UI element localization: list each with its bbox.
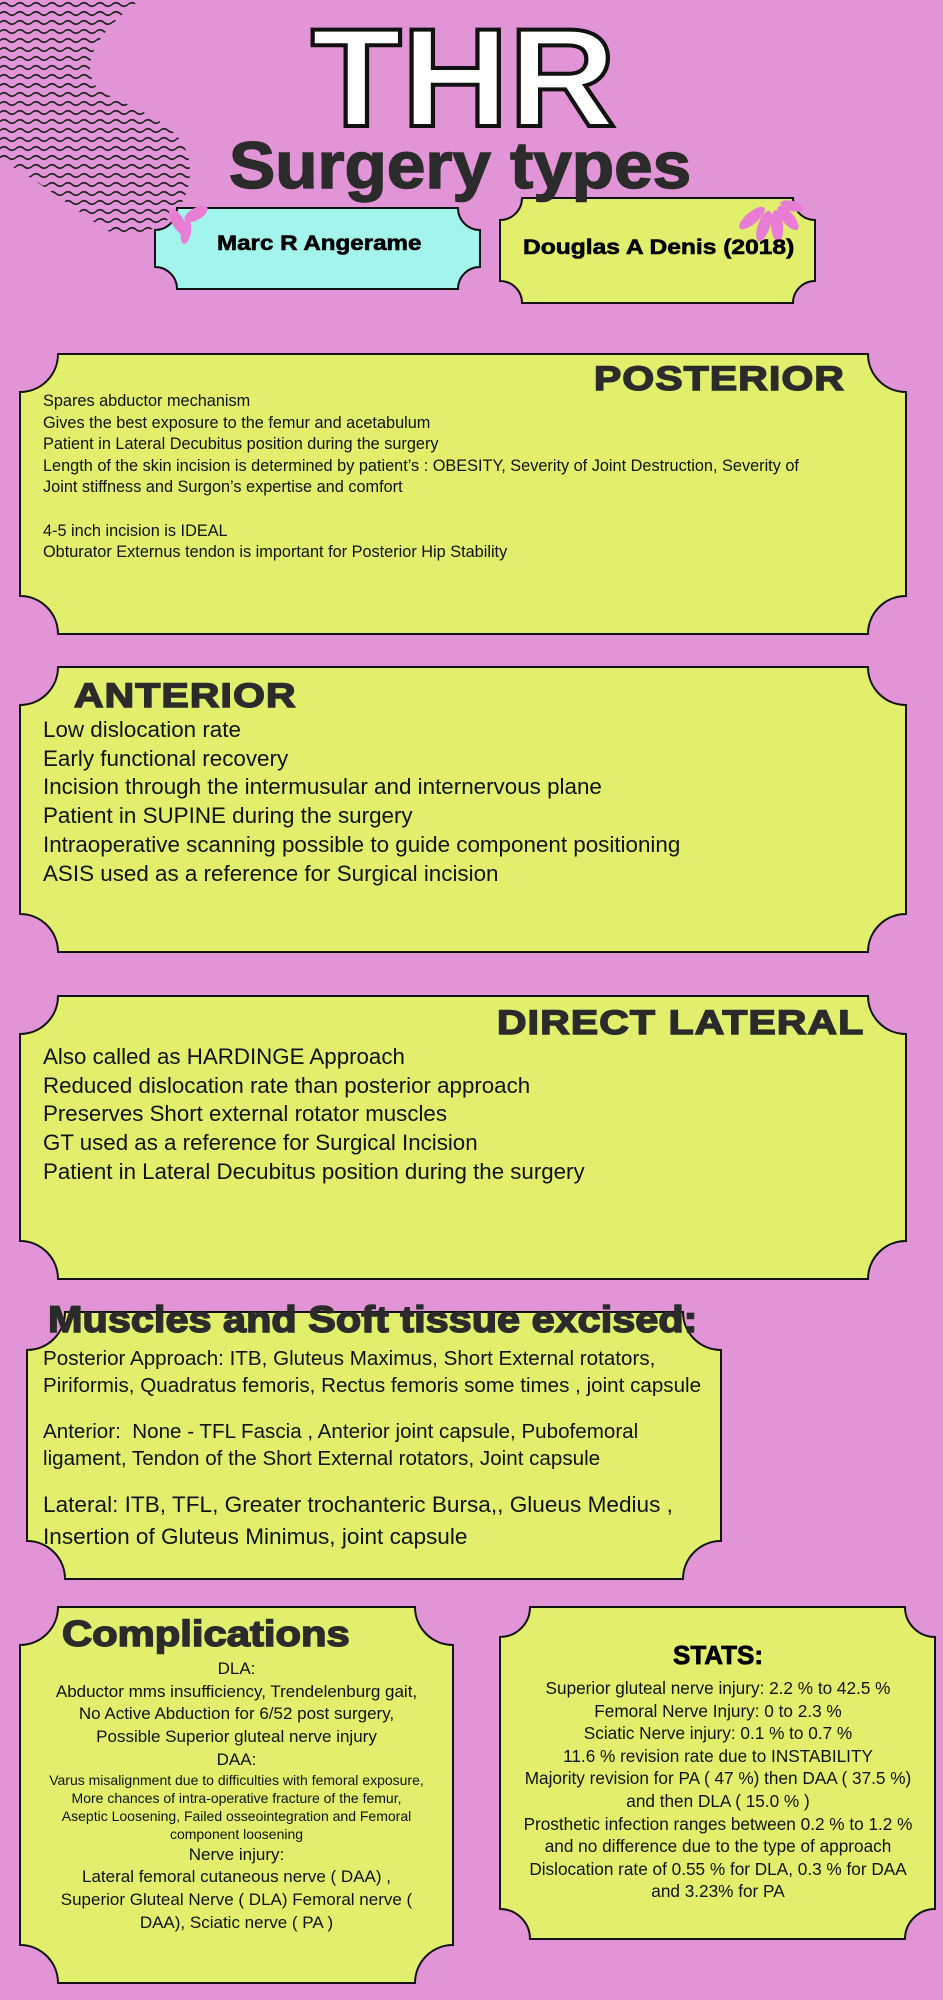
text: complications list: Superior Gluteal Nerve ( DLA) Femoral nerve ( [61, 1890, 412, 1909]
panel: direct lateral [43, 1004, 864, 1184]
heading: ANTERIOR: ANTERIOR [74, 677, 297, 715]
panel: anterior [43, 677, 680, 886]
text: stats list: 11.6 % revision rate due to INSTABILITY [563, 1746, 873, 1766]
author: Douglas A Denis: Douglas A Denis (2018) [523, 236, 794, 259]
text: stats list [524, 1678, 912, 1901]
decoration: wavy lines [0, 0, 190, 232]
author: Marc R Angerame: Marc R Angerame [217, 232, 421, 255]
text: lateral points: Preserves Short external rotator muscles [43, 1101, 447, 1126]
text: posterior points: Spares abductor mechanism [43, 392, 250, 410]
text: lateral points: GT used as a reference for Surgical Incision [43, 1130, 478, 1155]
text: anterior points [43, 717, 680, 886]
text: posterior points: 4-5 inch incision is IDEAL [43, 522, 228, 540]
panel: muscles excised: ligament, Tendon of the Short External rotators, Joint capsule [43, 1447, 600, 1470]
text: stats list: Sciatic Nerve injury: 0.1 % to 0.7 % [584, 1723, 852, 1743]
heading: Muscles and Soft tissue excised: Muscles and Soft tissue excised: [48, 1299, 697, 1340]
heading: Complications: Complications [62, 1613, 350, 1654]
text: anterior points: Intraoperative scanning possible to guide component positioning [43, 832, 680, 857]
subtitle: Surgery types: Surgery types [229, 128, 691, 202]
text: lateral points: Reduced dislocation rate than posterior approach [43, 1073, 530, 1098]
heading: POSTERIOR: POSTERIOR [594, 360, 845, 398]
heading: STATS: STATS: [673, 1640, 763, 1670]
text: stats list: Dislocation rate of 0.55 % for DLA, 0.3 % for DAA [529, 1859, 907, 1879]
text: anterior points: Incision through the intermusular and internervous plane [43, 774, 602, 799]
title: THR: THR [311, 0, 616, 156]
text: anterior points: Low dislocation rate [43, 717, 241, 742]
icon: flower right [736, 198, 805, 243]
text: muscles lists [43, 1347, 701, 1397]
text: complications list: DAA), Sciatic nerve ( PA ) [140, 1913, 333, 1932]
text: complications list: Abductor mms insufficiency, Trendelenburg gait, [56, 1682, 417, 1701]
panel: muscles excised: Anterior: None - TFL Fascia , Anterior joint capsule, Pubofemoral [43, 1420, 638, 1443]
panel: posterior [43, 360, 845, 561]
panel: muscles excised: Lateral: ITB, TFL, Greater trochanteric Bursa,, Glueus Medius , [43, 1492, 673, 1517]
icon: flower left [165, 202, 210, 245]
text: stats list: Majority revision for PA ( 47 %) then DAA ( 37.5 %) [525, 1768, 911, 1788]
text: complications list: DAA: [217, 1750, 256, 1769]
text: anterior points: Patient in SUPINE during the surgery [43, 803, 413, 828]
panel: muscles excised [43, 1299, 701, 1549]
text: complications list: Lateral femoral cutaneous nerve ( DAA) , [82, 1867, 391, 1886]
text: anterior points: Early functional recovery [43, 746, 288, 771]
text: complications list: Possible Superior gluteal nerve injury [96, 1727, 377, 1746]
text: posterior points: Length of the skin incision is determined by patient’s : OBESITY, Severity of Joint Destruction, Severity of [43, 457, 799, 475]
panel: complications [49, 1613, 424, 1932]
text: posterior points: Joint stiffness and Surgon’s expertise and comfort [43, 478, 403, 496]
text: complications list [49, 1659, 424, 1932]
text: complications list: No Active Abduction for 6/52 post surgery, [79, 1704, 394, 1723]
text: posterior points: Patient in Lateral Decubitus position during the surgery [43, 435, 439, 453]
text: anterior points: ASIS used as a reference for Surgical incision [43, 861, 499, 886]
text: complications list: More chances of intra-operative fracture of the femur, [72, 1790, 401, 1806]
text: posterior points: Obturator Externus tendon is important for Posterior Hip Stability [43, 543, 507, 561]
text: muscles lists: Posterior Approach: ITB, Gluteus Maximus, Short External rotators, [43, 1347, 655, 1370]
text: stats list: and 3.23% for PA [651, 1881, 785, 1901]
text: lateral points [43, 1044, 585, 1184]
text: complications list: DLA: [218, 1659, 255, 1678]
text: stats list: Superior gluteal nerve injury: 2.2 % to 42.5 % [546, 1678, 890, 1698]
panel: stats [524, 1640, 912, 1901]
text: complications list: component loosening [170, 1826, 303, 1842]
text: posterior points [43, 392, 799, 561]
text: complications list: Nerve injury: [189, 1845, 284, 1864]
text: lateral points: Also called as HARDINGE Approach [43, 1044, 405, 1069]
panel: muscles excised: Insertion of Gluteus Minimus, joint capsule [43, 1524, 467, 1549]
text: stats list: and then DLA ( 15.0 % ) [626, 1791, 810, 1811]
text: complications list: Aseptic Loosening, Failed osseointegration and Femoral [62, 1808, 411, 1824]
text: stats list: and no difference due to the type of approach [545, 1836, 891, 1856]
text: lateral points: Patient in Lateral Decubitus position during the surgery [43, 1159, 585, 1184]
text: complications list: Varus misalignment due to difficulties with femoral exposure, [49, 1772, 424, 1788]
heading: DIRECT LATERAL: DIRECT LATERAL [497, 1004, 864, 1042]
text: muscles lists: Piriformis, Quadratus femoris, Rectus femoris some times , joint capsule [43, 1374, 701, 1397]
text: stats list: Femoral Nerve Injury: 0 to 2.3 % [594, 1701, 842, 1721]
text: stats list: Prosthetic infection ranges between 0.2 % to 1.2 % [524, 1814, 912, 1834]
text: posterior points: Gives the best exposure to the femur and acetabulum [43, 414, 430, 432]
